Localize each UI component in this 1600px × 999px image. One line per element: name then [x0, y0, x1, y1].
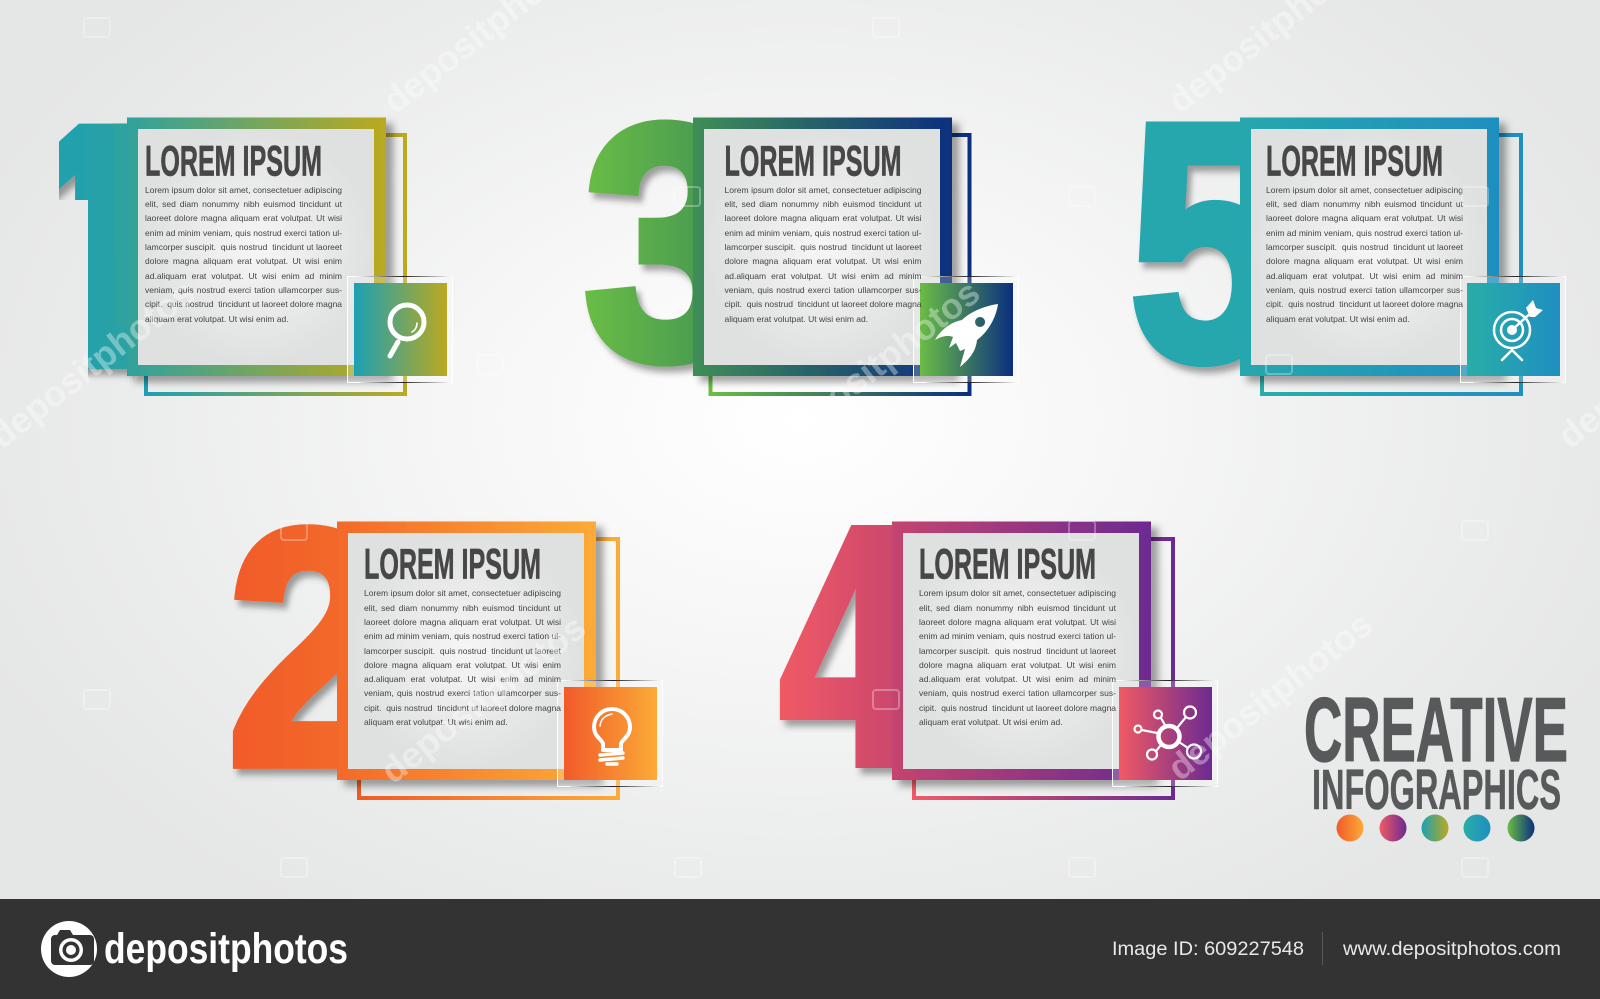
body text	[145, 185, 342, 324]
watermark: depositphotos	[373, 606, 593, 791]
icon: target	[1494, 300, 1543, 360]
watermark: depositphotos	[1160, 603, 1380, 788]
body text: laoreet dolore magna aliquam erat volutpat. Ut wisi	[724, 213, 922, 223]
heading: LOREM IPSUM	[364, 541, 541, 588]
gradient frame	[127, 118, 386, 376]
body text: cipit. quis nostrud tincidunt ut laoreet dolore magna	[364, 703, 561, 713]
body text: Lorem ipsum dolor sit amet, consectetuer adipiscing	[724, 185, 922, 195]
inner card	[138, 129, 374, 365]
body text: enim ad minim veniam, quis nostrud exerci tation ul-	[145, 228, 342, 238]
icon box	[1112, 680, 1218, 786]
outline frame	[359, 538, 618, 798]
number 1: 1	[20, 53, 158, 438]
outline frame	[914, 538, 1173, 798]
icon: magnifier	[390, 305, 424, 356]
outline frame	[146, 135, 405, 394]
body text: elit, sed diam nonummy nibh euismod tincidunt ut	[145, 199, 342, 209]
colour dots	[1336, 814, 1534, 842]
divider	[1322, 932, 1323, 965]
body text: laoreet dolore magna aliquam erat volutpat. Ut wisi	[145, 213, 342, 223]
body text: aliquam erat volutpat. Ut wisi enim ad.	[364, 717, 508, 727]
body text	[364, 588, 561, 727]
body text: Lorem ipsum dolor sit amet, consectetuer adipiscing	[145, 185, 342, 195]
logo wordmark: depositphotos	[104, 925, 348, 973]
gradient frame	[1240, 118, 1499, 376]
body text: aliquam erat volutpat. Ut wisi enim ad.	[145, 314, 289, 324]
body text: Lorem ipsum dolor sit amet, consectetuer adipiscing	[1266, 185, 1463, 195]
body text: aliquam erat volutpat. Ut wisi enim ad.	[724, 314, 868, 324]
body text: veniam, quis nostrud exerci tation ullamcorper sus-	[145, 285, 342, 295]
body text: elit, sed diam nonummy nibh euismod tincidunt ut	[1266, 199, 1463, 209]
body text: dolore magna aliquam erat volutpat. Ut wisi enim	[1266, 256, 1463, 266]
inner card	[704, 129, 940, 365]
body text	[919, 588, 1116, 727]
body text: dolore magna aliquam erat volutpat. Ut wisi enim	[919, 660, 1116, 670]
body text	[1266, 185, 1463, 324]
body text: enim ad minim veniam, quis nostrud exerci tation ul-	[364, 631, 561, 641]
body text: cipit. quis nostrud tincidunt ut laoreet dolore magna	[919, 703, 1116, 713]
body text: veniam, quis nostrud exerci tation ullamcorper sus-	[1266, 285, 1463, 295]
body text: Lorem ipsum dolor sit amet, consectetuer adipiscing	[919, 588, 1116, 598]
inner card	[348, 532, 584, 768]
website: www.depositphotos.com	[1342, 939, 1561, 960]
body text: aliquam erat volutpat. Ut wisi enim ad.	[919, 717, 1063, 727]
body text: ad.aliquam erat volutpat. Ut wisi enim ad minim	[1266, 271, 1463, 281]
body text: ad.aliquam erat volutpat. Ut wisi enim ad minim	[919, 674, 1116, 684]
body text: elit, sed diam nonummy nibh euismod tincidunt ut	[364, 603, 561, 613]
icon: light bulb	[594, 708, 630, 764]
body text: enim ad minim veniam, quis nostrud exerci tation ul-	[724, 228, 922, 238]
icon box	[348, 276, 452, 382]
watermark: depositphotos	[767, 271, 987, 456]
gradient frame	[337, 521, 596, 780]
panel 5: target	[1132, 118, 1566, 396]
gradient frame	[693, 118, 952, 376]
body text: lamcorper suscipit. quis nostrud tincidunt ut laoreet	[1266, 242, 1463, 252]
icon box	[558, 680, 662, 786]
panel 1: magnifier	[59, 118, 453, 396]
heading: LOREM IPSUM	[1266, 138, 1443, 186]
heading: LOREM IPSUM	[919, 541, 1096, 588]
body text: cipit. quis nostrud tincidunt ut laoreet dolore magna	[724, 299, 922, 309]
outline frame	[1262, 135, 1521, 394]
outline frame	[710, 135, 970, 394]
number 4: 4	[779, 454, 915, 836]
number 2: 2	[227, 459, 390, 835]
number 4	[780, 525, 892, 778]
body text: veniam, quis nostrud exerci tation ullamcorper sus-	[724, 285, 922, 295]
logo mark	[41, 921, 97, 977]
panel 2: light bulb	[232, 522, 663, 800]
body text: laoreet dolore magna aliquam erat volutpat. Ut wisi	[364, 617, 561, 627]
body text: elit, sed diam nonummy nibh euismod tincidunt ut	[724, 199, 922, 209]
body text: enim ad minim veniam, quis nostrud exerci tation ul-	[919, 631, 1116, 641]
body text: lamcorper suscipit. quis nostrud tincidunt ut laoreet	[919, 646, 1116, 656]
heading: LOREM IPSUM	[724, 138, 902, 186]
body text: lamcorper suscipit. quis nostrud tincidunt ut laoreet	[724, 242, 922, 252]
body text: Lorem ipsum dolor sit amet, consectetuer adipiscing	[364, 588, 561, 598]
body text: laoreet dolore magna aliquam erat volutpat. Ut wisi	[919, 617, 1116, 627]
body text: dolore magna aliquam erat volutpat. Ut wisi enim	[364, 660, 561, 670]
body text: veniam, quis nostrud exerci tation ullamcorper sus-	[364, 688, 561, 698]
body text: veniam, quis nostrud exerci tation ullamcorper sus-	[919, 688, 1116, 698]
body text: cipit. quis nostrud tincidunt ut laoreet dolore magna	[1266, 299, 1463, 309]
panel 3: rocket	[585, 118, 1015, 396]
body text: ad.aliquam erat volutpat. Ut wisi enim ad minim	[145, 271, 342, 281]
body text: laoreet dolore magna aliquam erat volutpat. Ut wisi	[1266, 213, 1463, 223]
body text: dolore magna aliquam erat volutpat. Ut wisi enim	[145, 256, 342, 266]
footer bar	[0, 899, 1600, 999]
body text: dolore magna aliquam erat volutpat. Ut wisi enim	[724, 256, 922, 266]
panel 4: network	[780, 522, 1218, 800]
body text: ad.aliquam erat volutpat. Ut wisi enim ad minim	[364, 674, 561, 684]
body text: elit, sed diam nonummy nibh euismod tincidunt ut	[919, 603, 1116, 613]
brand lockup: creative infographics	[1304, 680, 1568, 842]
body text: ad.aliquam erat volutpat. Ut wisi enim ad minim	[724, 271, 922, 281]
inner card	[1251, 129, 1487, 365]
gradient frame	[892, 521, 1151, 780]
icon: network	[1134, 706, 1201, 759]
inner card	[903, 532, 1139, 768]
icon box	[914, 276, 1018, 382]
heading: LOREM IPSUM	[145, 138, 322, 186]
icon: rocket	[935, 304, 998, 367]
body text	[724, 185, 922, 324]
number 3: 3	[583, 56, 750, 430]
body text: aliquam erat volutpat. Ut wisi enim ad.	[1266, 314, 1410, 324]
icon box	[1460, 276, 1566, 382]
image id: Image ID: 609227548	[1112, 939, 1304, 960]
body text: lamcorper suscipit. quis nostrud tincidunt ut laoreet	[364, 646, 561, 656]
number 1	[59, 124, 135, 379]
body text: cipit. quis nostrud tincidunt ut laoreet dolore magna	[145, 299, 342, 309]
body text: lamcorper suscipit. quis nostrud tincidunt ut laoreet	[145, 242, 342, 252]
body text: enim ad minim veniam, quis nostrud exerci tation ul-	[1266, 228, 1463, 238]
number 5: 5	[1129, 54, 1283, 431]
